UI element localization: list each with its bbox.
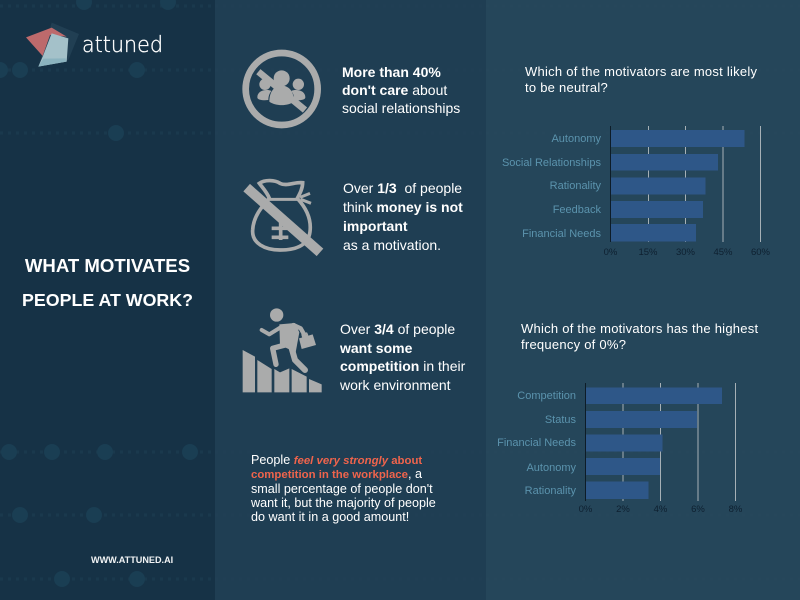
- category labels: Autonomy: [551, 133, 601, 145]
- icon: no social relationships: [242, 50, 321, 128]
- axis labels: 2%: [616, 504, 630, 515]
- title: WHAT MOTIVATES: [25, 255, 190, 276]
- callout text: do want it in a good amount!: [251, 510, 409, 524]
- heading: chart 1: Which of the motivators are most likely: [525, 64, 757, 78]
- logo: attuned: [26, 23, 163, 67]
- axis labels: 0%: [604, 247, 618, 258]
- text: competition stat: work environment: [340, 377, 450, 393]
- axis labels: 15%: [638, 247, 658, 258]
- logo wordmark: attuned: [82, 33, 163, 58]
- text: social relationships stat: [342, 64, 460, 116]
- category labels: Autonomy: [526, 462, 576, 474]
- text: money stat: important: [343, 218, 408, 234]
- heading: chart 2: Which of the motivators has the highest: [521, 320, 758, 336]
- category labels: Financial Needs: [522, 228, 601, 240]
- heading: chart 1: to be neutral?: [525, 80, 608, 95]
- title: [22, 255, 193, 310]
- text: social relationships stat: social relationships: [342, 100, 460, 116]
- category labels: Rationality: [525, 485, 576, 497]
- text: competition stat: Over 3/4 of people: [340, 321, 455, 337]
- heading: chart 2: frequency of 0%?: [521, 337, 626, 352]
- icon: no money: [243, 178, 324, 256]
- axis labels: 8%: [729, 504, 743, 515]
- heading: chart 1: [525, 64, 757, 95]
- category labels: [502, 133, 601, 240]
- text: competition stat: [340, 321, 466, 393]
- axis labels: 4%: [654, 504, 668, 515]
- text: money stat: think money is not: [343, 199, 463, 215]
- website link: WWW.ATTUNED.AI: [91, 555, 173, 565]
- axis labels: 60%: [751, 247, 771, 258]
- axis labels: 0%: [579, 504, 593, 515]
- category labels: Rationality: [550, 180, 601, 192]
- heading: chart 2: [521, 320, 758, 352]
- axis labels: [579, 504, 743, 515]
- category labels: Social Relationships: [502, 157, 601, 169]
- bar chart: neutral motivators: [502, 126, 771, 258]
- category labels: [497, 390, 576, 497]
- category labels: Feedback: [553, 204, 601, 216]
- axis labels: 6%: [691, 504, 705, 515]
- callout text: People feel very strongly about: [251, 453, 422, 467]
- text: social relationships stat: don't care about: [342, 82, 447, 98]
- text: social relationships stat: More than 40%: [342, 64, 441, 80]
- category labels: Competition: [517, 390, 576, 402]
- text: competition stat: want some: [340, 340, 412, 356]
- icon: competition climber: [242, 308, 322, 392]
- callout text: competition in the workplace, a: [251, 467, 422, 481]
- text: competition stat: competition in their: [340, 358, 465, 374]
- axis labels: 45%: [713, 247, 733, 258]
- category labels: Status: [545, 414, 576, 426]
- text: money stat: as a motivation.: [343, 237, 441, 253]
- text: money stat: Over 1/3 of people: [343, 180, 462, 196]
- axis labels: 30%: [676, 247, 696, 258]
- title: PEOPLE AT WORK?: [22, 290, 193, 310]
- callout text: [251, 453, 436, 524]
- category labels: Financial Needs: [497, 437, 576, 449]
- text: money stat: [343, 180, 463, 253]
- callout text: want it, but the majority of people: [251, 496, 436, 510]
- bar chart: frequency of 0%: [497, 383, 743, 515]
- axis labels: [604, 247, 771, 258]
- callout text: small percentage of people don't: [251, 482, 433, 496]
